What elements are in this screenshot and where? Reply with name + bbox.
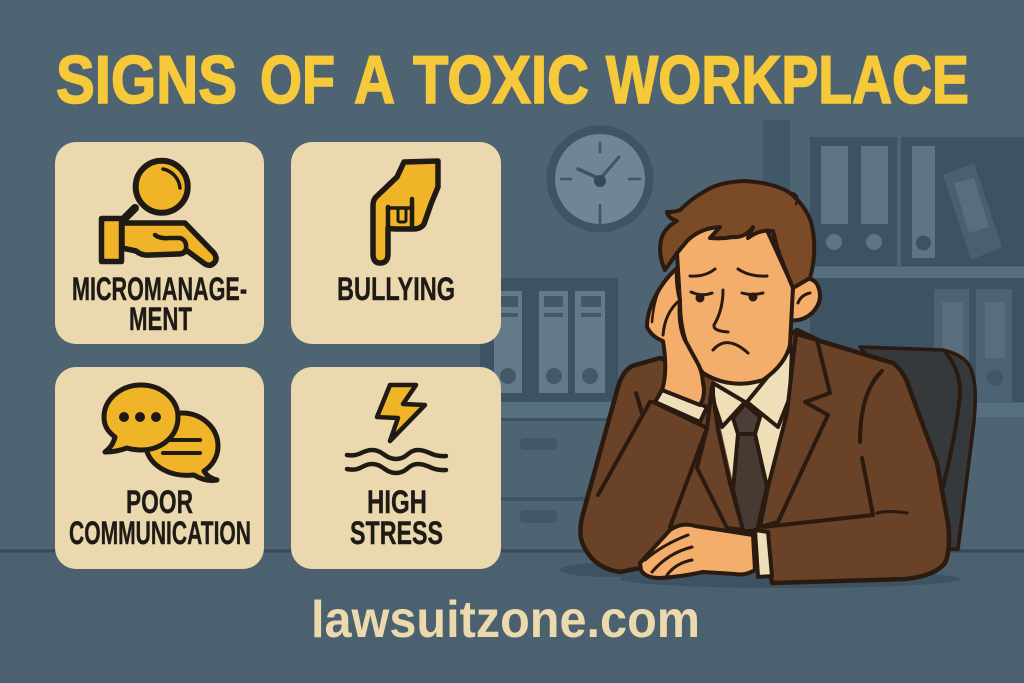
- eyes: [691, 292, 712, 295]
- label: BULLYING: [337, 271, 455, 307]
- desk shadow: [560, 563, 960, 588]
- title: A: [354, 42, 395, 118]
- head: [660, 181, 820, 384]
- shirt: [713, 340, 792, 492]
- wall clock: [546, 126, 654, 232]
- drawers: [500, 421, 610, 551]
- title: OF: [260, 42, 335, 118]
- hair: [660, 181, 814, 288]
- raised cuff: [655, 390, 707, 422]
- lower right shelf with binders: [763, 278, 1024, 417]
- chair: [860, 347, 975, 549]
- panel: micromanagement: [55, 142, 264, 344]
- title: SIGNS: [56, 42, 237, 118]
- panel: poor communication: [55, 367, 264, 569]
- jacket: [580, 330, 949, 583]
- panel: high stress: [291, 367, 501, 569]
- icon: speech bubbles: [104, 385, 218, 480]
- mouth: [713, 343, 748, 353]
- title: [56, 42, 969, 118]
- hand on cheek: [647, 268, 704, 405]
- ear: [790, 279, 820, 320]
- title: TOXIC: [413, 42, 589, 118]
- illustration: stressed man at desk: [560, 181, 975, 588]
- label: HIGH: [367, 484, 427, 520]
- right cuff: [755, 530, 772, 577]
- collar and lapels: [598, 334, 907, 530]
- panel: poor communication: COMMUNICATION: [69, 515, 251, 551]
- website: lawsuitzone.com: [311, 591, 700, 649]
- panel: micromanagement: MENT: [129, 301, 192, 337]
- panel: high stress: STRESS: [350, 515, 443, 551]
- upper shelf with binders: [763, 120, 1024, 278]
- icon: magnifier over hand: [102, 161, 216, 265]
- brows: [690, 269, 715, 276]
- icon: pointing hand: [373, 161, 438, 263]
- icon: lightning bolt and waves: [347, 385, 446, 473]
- resting hand: [640, 525, 755, 578]
- panel: bullying: [291, 142, 501, 344]
- label: POOR: [126, 484, 193, 520]
- label: MICROMANAGE-: [72, 271, 247, 307]
- tie: [733, 404, 767, 531]
- desk line: [0, 550, 1024, 552]
- nose: [714, 290, 728, 332]
- face: [677, 215, 793, 384]
- lower left shelf with binders: [480, 278, 640, 421]
